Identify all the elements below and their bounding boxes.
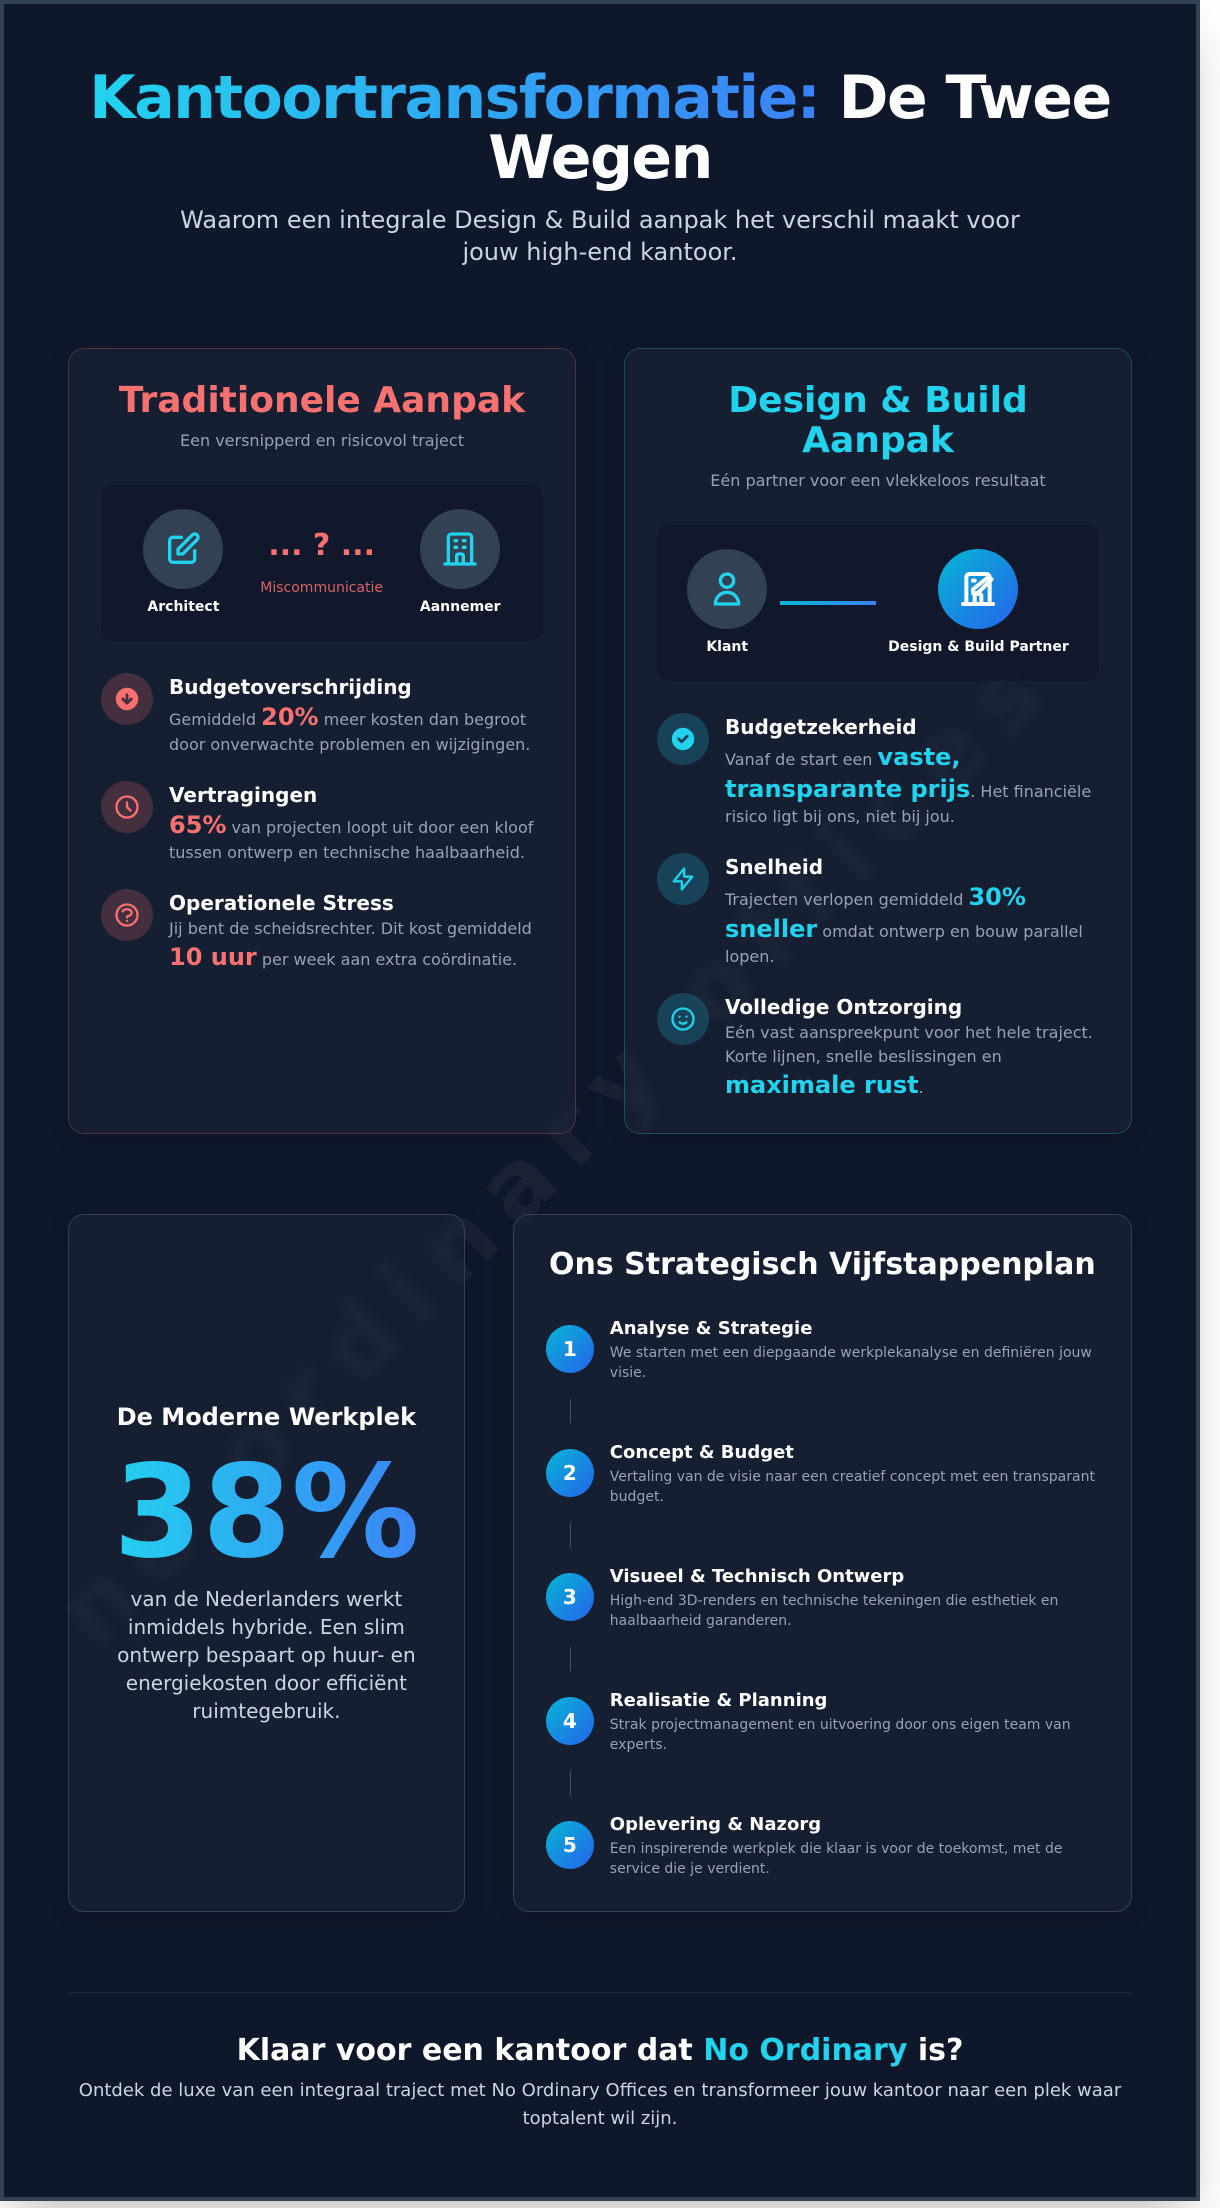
item: speed: Trajecten verlopen gemiddeld 30% sneller omdat ontwerp en bouw parallel lopen. [725, 883, 1083, 966]
node: architect [143, 509, 223, 615]
step 1: We starten met een diepgaande werkplekanalyse en definiëren jouw visie. [610, 1345, 1092, 1381]
statistic and plan section [68, 1214, 1132, 1912]
footer heading: Klaar voor een kantoor dat No Ordinary is? [237, 2033, 963, 2068]
step 1 [546, 1318, 1092, 1381]
item: full care [657, 993, 1093, 1099]
node: partner: Design & Build Partner [888, 639, 1069, 655]
miscommunication label: Miscommunicatie [260, 580, 383, 596]
item: delays [101, 781, 534, 862]
miscommunication label: ... ? ... [268, 528, 375, 563]
item: speed [657, 853, 1083, 966]
diagram: single partner [657, 525, 1099, 681]
panel: five step plan [513, 1214, 1132, 1912]
statistic description: van de Nederlanders werkt inmiddels hybride. Een slim ontwerp bespaart op huur- en energiekosten door efficiënt ruimtegebruik. [117, 1587, 416, 1723]
panel: traditional approach [68, 348, 576, 1134]
item: full care: Volledige Ontzorging [725, 995, 962, 1019]
footer call to action [68, 1992, 1132, 2133]
icon: lightning [657, 853, 709, 905]
statistic value: 38% [113, 1438, 420, 1587]
panel subtitle: Eén partner voor een vlekkeloos resultaat [710, 471, 1046, 490]
step 1: Analyse & Strategie [610, 1318, 812, 1339]
icon: arrow down circle [101, 673, 153, 725]
panel subtitle: Een versnipperd en risicovol traject [180, 431, 464, 450]
step 4 [546, 1690, 1071, 1753]
icon: smile [657, 993, 709, 1045]
connector line [780, 601, 876, 605]
node: contractor: Aannemer [420, 599, 501, 615]
node: client [687, 549, 767, 655]
node: partner [888, 549, 1069, 655]
step 3: High-end 3D-renders en technische tekeningen die esthetiek en haalbaarheid garanderen. [610, 1593, 1058, 1629]
step 2: Concept & Budget [610, 1442, 794, 1463]
title: Kantoortransformatie: De Twee Wegen [89, 63, 1111, 193]
footer text: Ontdek de luxe van een integraal traject met No Ordinary Offices en transformeer jouw kantoor naar een plek waar toptalent wil zijn. [79, 2080, 1121, 2129]
step 5 [546, 1814, 1062, 1877]
step 4: Strak projectmanagement en uitvoering door ons eigen team van experts. [610, 1717, 1071, 1753]
item: budget certainty: Budgetzekerheid [725, 715, 917, 739]
icon: question mark [101, 889, 153, 941]
heading: design and build: Design & Build Aanpak [728, 380, 1028, 461]
watermark: no ordinary offices [33, 624, 1076, 1667]
step 4: Realisatie & Planning [610, 1690, 827, 1711]
header [89, 63, 1111, 266]
step 5: Een inspirerende werkplek die klaar is voor de toekomst, met de service die je verdient. [610, 1841, 1062, 1877]
step 4: 4 [563, 1709, 577, 1733]
node: client: Klant [706, 639, 748, 655]
item: budget overrun [101, 673, 530, 754]
item: operational stress: Jij bent de scheidsrechter. Dit kost gemiddeld 10 uur per week aan extra coördinatie. [169, 919, 532, 971]
item: delays: Vertragingen [169, 783, 317, 807]
item: speed: Snelheid [725, 855, 823, 879]
icon: check circle [657, 713, 709, 765]
step 1: 1 [563, 1337, 577, 1361]
item: budget overrun: Budgetoverschrijding [169, 675, 412, 699]
node: contractor [420, 509, 501, 615]
step 2: 2 [563, 1461, 577, 1485]
diagram: fragmented communication [101, 485, 543, 641]
step 5: 5 [563, 1833, 577, 1857]
heading: traditional approach: Traditionele Aanpak [119, 380, 525, 421]
item: operational stress: Operationele Stress [169, 891, 394, 915]
step 5: Oplevering & Nazorg [610, 1814, 821, 1835]
panel: modern workplace statistic [68, 1214, 465, 1912]
item: budget certainty [657, 713, 1091, 826]
statistic heading: De Moderne Werkplek [117, 1403, 416, 1431]
item: operational stress [101, 889, 532, 971]
step 2 [546, 1442, 1095, 1505]
step 2: Vertaling van de visie naar een creatief concept met een transparant budget. [610, 1469, 1095, 1505]
miscommunication label [260, 528, 383, 596]
step 3: 3 [563, 1585, 577, 1609]
comparison section [68, 348, 1132, 1134]
item: budget certainty: Vanaf de start een vaste, transparante prijs. Het financiële risico ligt bij ons, niet bij jou. [725, 743, 1091, 826]
plan heading: Ons Strategisch Vijfstappenplan [549, 1247, 1096, 1282]
step 3: Visueel & Technisch Ontwerp [610, 1566, 904, 1587]
item: delays: 65% van projecten loopt uit door een kloof tussen ontwerp en technische haalbaarheid. [169, 811, 533, 862]
subtitle: Waarom een integrale Design & Build aanpak het verschil maakt voor jouw high-end kantoor. [180, 206, 1020, 266]
item: budget overrun: Gemiddeld 20% meer kosten dan begroot door onverwachte problemen en wijzigingen. [169, 703, 530, 754]
node: architect: Architect [147, 599, 219, 615]
item: full care: Eén vast aanspreekpunt voor het hele traject. Korte lijnen, snelle beslissingen en maximale rust. [725, 1023, 1093, 1099]
panel: design and build approach [624, 348, 1132, 1134]
icon: clock [101, 781, 153, 833]
step 3 [546, 1566, 1058, 1629]
